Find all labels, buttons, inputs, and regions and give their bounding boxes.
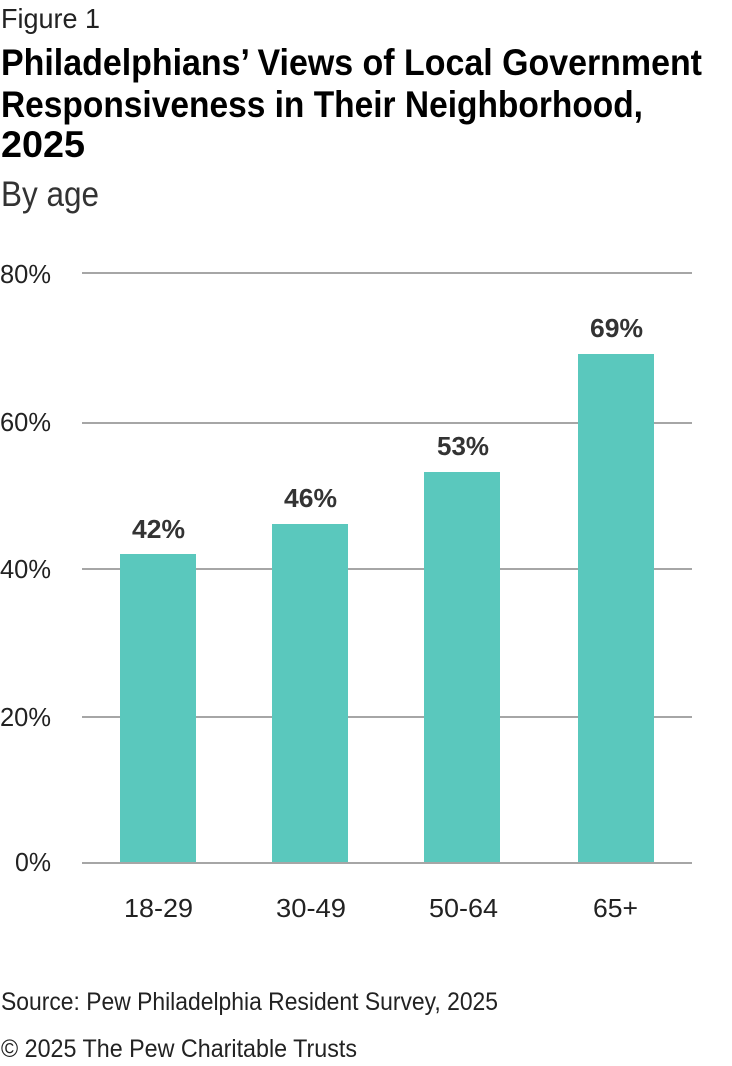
y axis labels: 60% bbox=[0, 407, 51, 437]
y axis labels bbox=[0, 259, 51, 877]
y axis labels: 20% bbox=[0, 702, 51, 732]
y axis labels: 40% bbox=[0, 554, 51, 584]
bar chart bbox=[0, 259, 692, 923]
value labels: 53% bbox=[437, 431, 489, 461]
title: Responsiveness in Their Neighborhood, bbox=[1, 84, 643, 125]
value labels: 42% bbox=[132, 514, 185, 544]
source note: Source: Pew Philadelphia Resident Survey, 2025 bbox=[1, 988, 498, 1016]
figure label: Figure 1 bbox=[1, 3, 100, 34]
subtitle: By age bbox=[1, 175, 99, 214]
category labels bbox=[124, 893, 638, 923]
y axis labels: 0% bbox=[15, 847, 51, 877]
title: 2025 bbox=[1, 124, 85, 165]
value labels: 46% bbox=[284, 483, 337, 513]
value labels bbox=[132, 313, 643, 544]
title bbox=[1, 42, 702, 165]
value labels: 69% bbox=[590, 313, 643, 343]
category labels: 30-49 bbox=[276, 893, 346, 923]
y axis labels: 80% bbox=[0, 259, 51, 289]
bars bbox=[120, 354, 654, 862]
category labels: 18-29 bbox=[124, 893, 193, 923]
category labels: 65+ bbox=[593, 893, 638, 923]
copyright: © 2025 The Pew Charitable Trusts bbox=[1, 1035, 357, 1063]
category labels: 50-64 bbox=[429, 893, 498, 923]
